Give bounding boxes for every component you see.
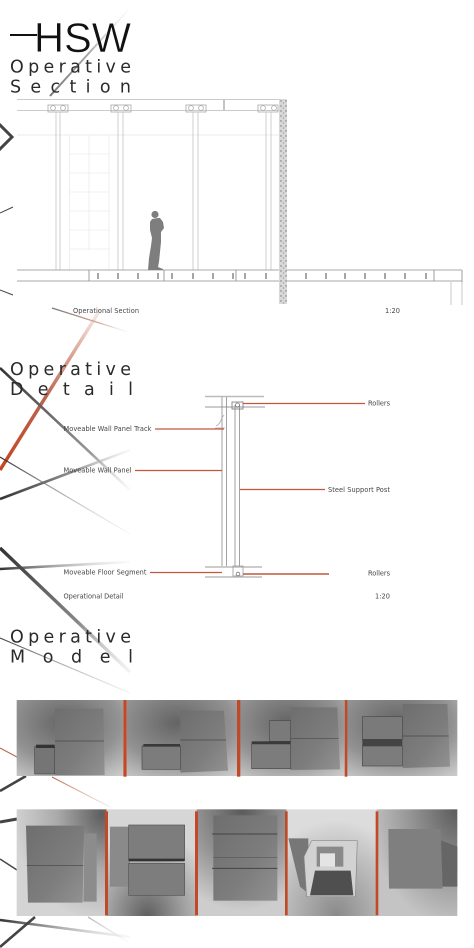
model photo 1 [35, 709, 105, 775]
model photo 8 [288, 838, 357, 897]
heading: Operative Model: Model [10, 648, 133, 668]
labels: detail annotations: Moveable Wall Panel [64, 466, 132, 474]
model photo 4 [362, 704, 450, 768]
photo strip: model row 2 [17, 809, 457, 916]
caption: operational section: Operational Section [73, 307, 139, 315]
heading: Operative Section: Operative [10, 58, 131, 78]
caption: operational section [73, 307, 400, 315]
heading: Operative Detail [10, 360, 133, 400]
caption: operational detail [64, 592, 390, 600]
model photo 5 [26, 826, 97, 903]
decorative diagonal lines [0, 10, 130, 947]
heading: Operative Detail: Detail [10, 380, 133, 400]
heading: Operative Model: Operative [10, 628, 131, 648]
labels: detail annotations: Rollers [368, 570, 391, 578]
model photo 6 [110, 825, 185, 895]
caption: operational detail: Operational Detail [64, 592, 124, 600]
heading: Operative Section: Section [10, 78, 131, 98]
title logo: HSW: HSW [34, 14, 131, 61]
labels: detail annotations: Moveable Wall Panel Track [64, 425, 152, 433]
heading: Operative Model [10, 628, 133, 668]
drawing: operational section [17, 100, 462, 305]
red dividers row 1 [123, 700, 347, 777]
heading: Operative Section [10, 58, 131, 98]
model photo 2 [142, 711, 228, 773]
caption: operational section: 1:20 [385, 307, 400, 315]
model photo 7 [212, 815, 277, 901]
concrete wall [279, 99, 287, 304]
labels: detail annotations: Moveable Floor Segment [64, 568, 147, 576]
labels: detail annotations: Rollers [368, 400, 391, 408]
red dividers row 2 [105, 811, 378, 915]
person silhouette [148, 211, 164, 270]
labels: detail annotations: Steel Support Post [328, 486, 390, 494]
drawing: operational detail [205, 396, 265, 577]
leader lines [135, 404, 365, 574]
labels: detail annotations [64, 400, 391, 578]
caption: operational detail: 1:20 [375, 592, 390, 600]
heading: Operative Detail: Operative [10, 360, 131, 380]
photo strip: model row 1 [17, 700, 457, 777]
model photo 9 [388, 829, 457, 889]
model photo 3 [252, 707, 340, 770]
